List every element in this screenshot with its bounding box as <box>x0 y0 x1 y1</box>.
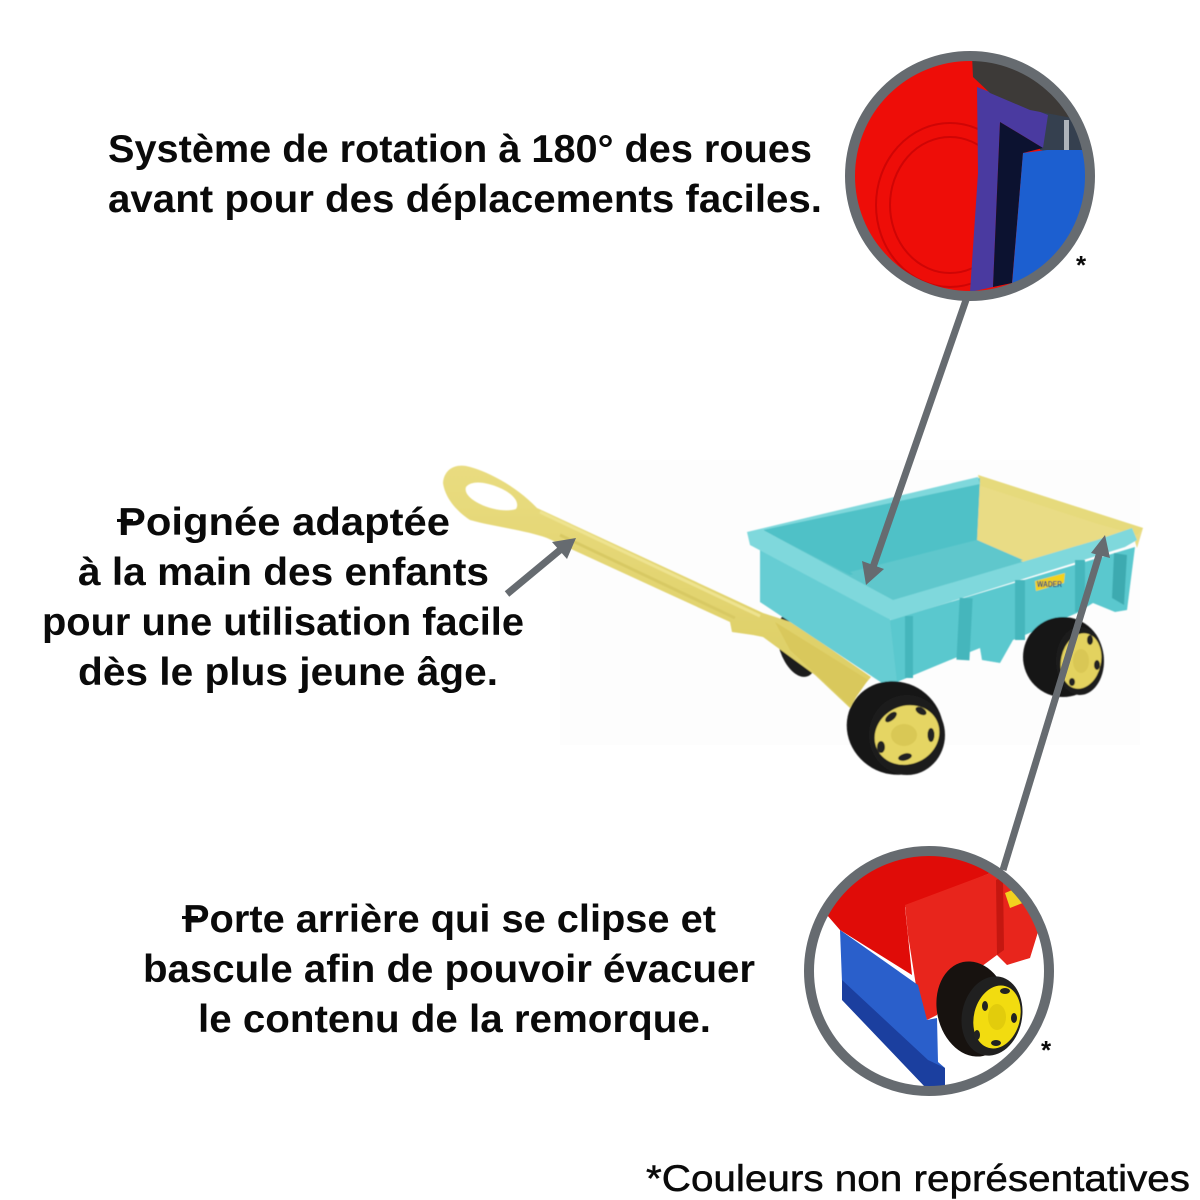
text block: rear door <box>143 898 755 1041</box>
asterisk: bottom circle: * <box>1041 1035 1052 1065</box>
heading text: rotation system: Système de rotation à 180° des roues <box>108 128 812 171</box>
text block: rear door: Porte arrière qui se clipse et <box>183 898 716 941</box>
heading text: rotation system <box>108 128 822 221</box>
wagon illustration <box>443 466 1143 792</box>
handle <box>443 466 871 708</box>
rear yellow tailgate <box>977 475 1143 562</box>
wagon interior <box>763 478 1023 602</box>
asterisk: top circle: * <box>1076 250 1087 280</box>
text block: handle: pour une utilisation facile <box>42 601 524 644</box>
text block: rear door: bascule afin de pouvoir évacuer <box>143 948 755 991</box>
detail circle: wheel rotation <box>850 55 1095 296</box>
arrow: text to handle <box>507 538 576 594</box>
text block: handle: à la main des enfants <box>78 551 489 594</box>
text block: handle: Poignée adaptée <box>118 501 450 544</box>
far front wheel <box>770 608 824 682</box>
arrow: top circle to wagon interior <box>862 300 966 585</box>
rear wheel <box>1023 617 1106 697</box>
wagon interior base <box>763 478 1097 602</box>
text block: rear door: le contenu de la remorque. <box>198 998 711 1041</box>
text block: handle: dès le plus jeune âge. <box>78 651 498 694</box>
front wheel <box>830 664 960 792</box>
logo badge: WADER <box>1037 580 1062 589</box>
arrow: bottom circle to tailgate <box>1003 535 1110 870</box>
logo badge <box>1035 573 1065 591</box>
detail circle: tipping tailgate <box>809 850 1050 1091</box>
text block: handle <box>42 501 524 694</box>
heading text: rotation system: avant pour des déplacements faciles. <box>108 178 822 221</box>
footnote: *Couleurs non représentatives <box>646 1158 1190 1199</box>
wagon rim and sides <box>747 477 1137 687</box>
